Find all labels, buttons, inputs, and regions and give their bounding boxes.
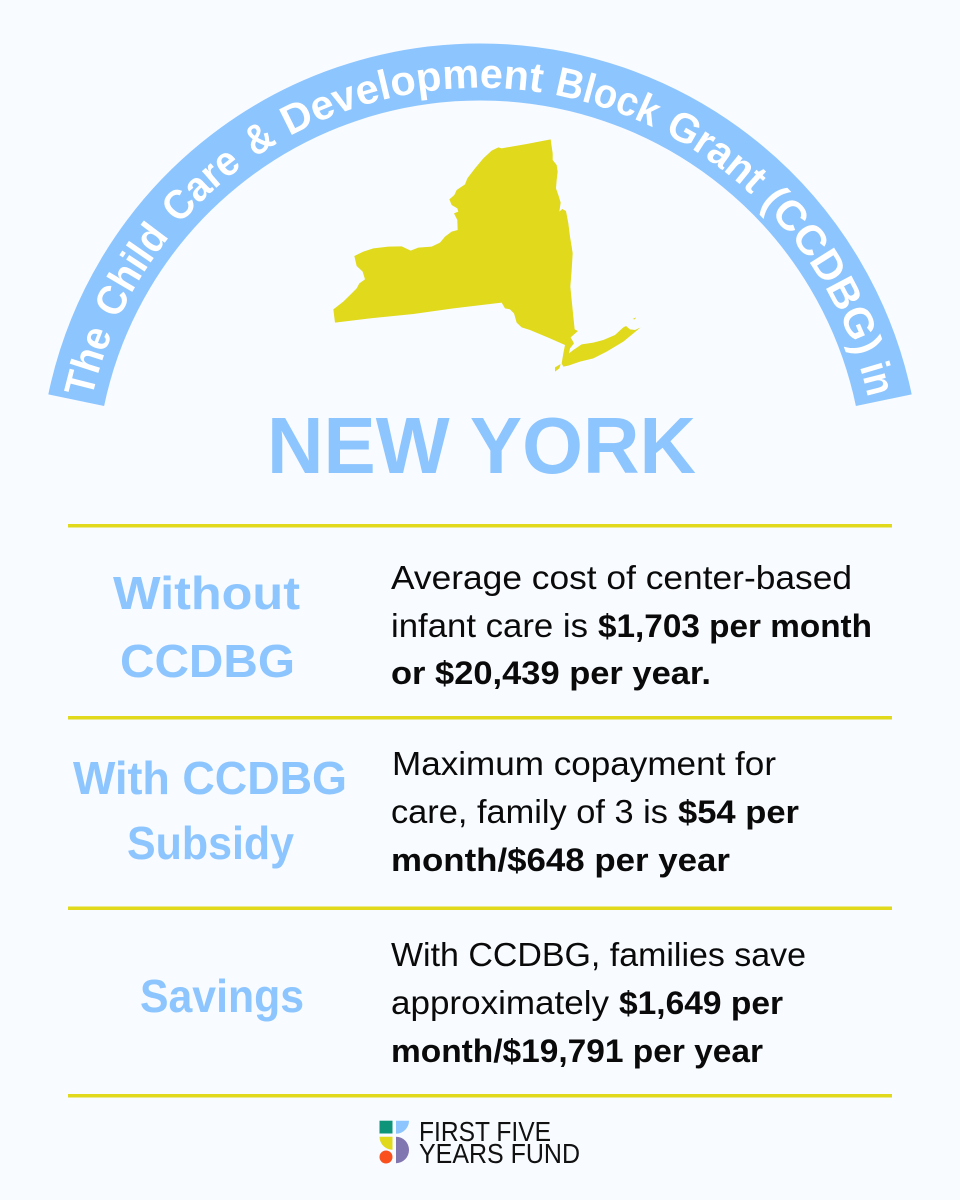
arched title banner: Care (164, 153, 238, 218)
arched title banner: Grant (670, 112, 766, 194)
text: families save: $1,649 per (619, 985, 783, 1021)
text: maximum copayment: care, family of 3 is (391, 793, 668, 830)
arched title banner: The (64, 329, 110, 392)
label: without CCDBG: Without (113, 567, 300, 619)
text: families save (391, 936, 806, 1069)
row: savings (140, 936, 806, 1069)
arched title banner: in (860, 360, 891, 396)
text: average cost: or $20,439 per year. (391, 655, 711, 691)
text: families save: month/$19,791 per year (391, 1033, 763, 1069)
logo: First Five Years Fund (380, 1116, 580, 1169)
label: with CCDBG subsidy: Subsidy (127, 817, 294, 869)
text: maximum copayment: Maximum copayment for (392, 745, 776, 782)
text: average cost (391, 559, 872, 691)
text: average cost: Average cost of center-based (391, 559, 852, 596)
arched title banner: & (247, 124, 277, 154)
arched title banner: Child (97, 220, 168, 314)
label: without CCDBG (113, 567, 300, 687)
text: maximum copayment (391, 745, 799, 878)
arched title banner: Development (279, 64, 544, 135)
icon: logo mark (380, 1121, 409, 1164)
arched title banner (48, 44, 912, 406)
label: with CCDBG subsidy (73, 752, 347, 869)
text: average cost: $1,703 per month (598, 608, 872, 644)
label: without CCDBG: CCDBG (120, 635, 295, 687)
icon: New York state map (333, 139, 641, 372)
text: families save: With CCDBG, families save (391, 936, 806, 973)
arched title banner: (CCDBG) (760, 188, 882, 354)
row: without CCDBG (113, 559, 872, 691)
heading: New York: NEW YORK (267, 401, 696, 490)
text: maximum copayment: $54 per (678, 794, 799, 830)
logo wordmark (419, 1116, 580, 1169)
row: with CCDBG subsidy (73, 745, 799, 878)
logo wordmark: YEARS FUND (419, 1138, 580, 1169)
arched title banner: Block (556, 67, 661, 127)
logo wordmark: FIRST FIVE (419, 1116, 551, 1147)
text: families save: approximately (391, 984, 610, 1021)
label: with CCDBG subsidy: With CCDBG (73, 752, 347, 804)
label: savings: Savings (140, 970, 304, 1022)
text: maximum copayment: month/$648 per year (391, 842, 730, 878)
text: average cost: infant care is (391, 607, 588, 644)
